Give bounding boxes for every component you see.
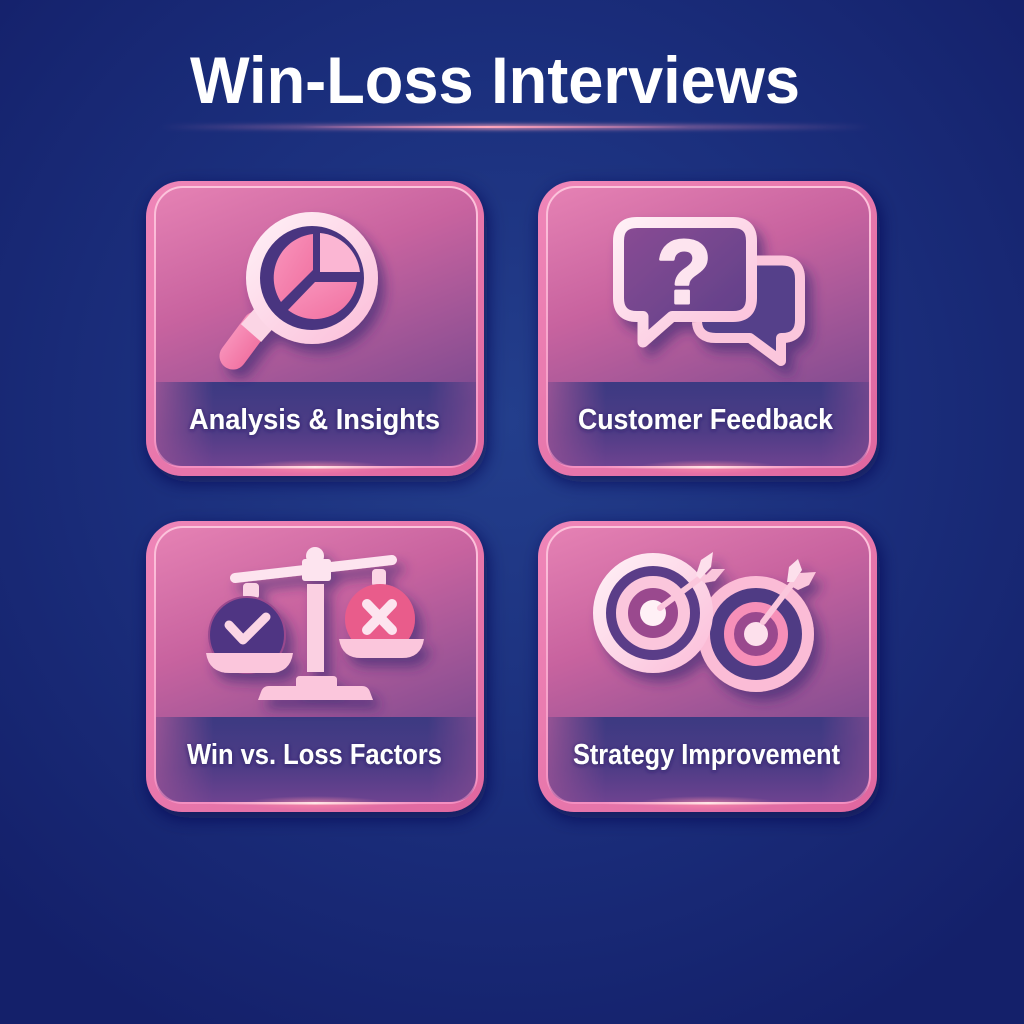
- icon: two targets with arrows: [600, 552, 816, 686]
- title: Win-Loss Interviews: [190, 43, 800, 117]
- label band: [156, 382, 476, 466]
- label: Strategy Improvement: [573, 739, 840, 771]
- icon: speech bubbles with question mark: [618, 222, 800, 361]
- panel: win vs loss factors: [146, 521, 484, 812]
- title underline glow: [160, 125, 870, 129]
- bottom glow: [603, 796, 813, 810]
- label band: [548, 382, 869, 466]
- label: Analysis & Insights: [189, 404, 440, 436]
- bottom glow: [210, 460, 420, 474]
- column and hub: [302, 547, 331, 672]
- left target: [600, 560, 706, 666]
- label: Win vs. Loss Factors: [187, 739, 442, 771]
- panel: customer feedback: [538, 181, 877, 476]
- bottom glow: [210, 796, 420, 810]
- right arrow: [763, 559, 816, 622]
- base: [258, 676, 373, 700]
- beam: [235, 560, 392, 578]
- label band: [156, 717, 476, 802]
- label band: [548, 717, 869, 802]
- panel: analysis and insights: [146, 181, 484, 476]
- icon: speech bubbles with question mark: ?: [657, 223, 711, 323]
- icon: magnifying glass with pie chart: [233, 219, 371, 356]
- right target: [704, 582, 808, 686]
- icon: balance scale: [206, 547, 424, 700]
- right weight with cross: [345, 569, 415, 654]
- left weight with check: [209, 583, 285, 673]
- left arrow: [660, 552, 725, 608]
- pans: [206, 653, 293, 673]
- label: Customer Feedback: [578, 404, 834, 436]
- bottom glow: [603, 460, 813, 474]
- panel: strategy improvement: [538, 521, 877, 812]
